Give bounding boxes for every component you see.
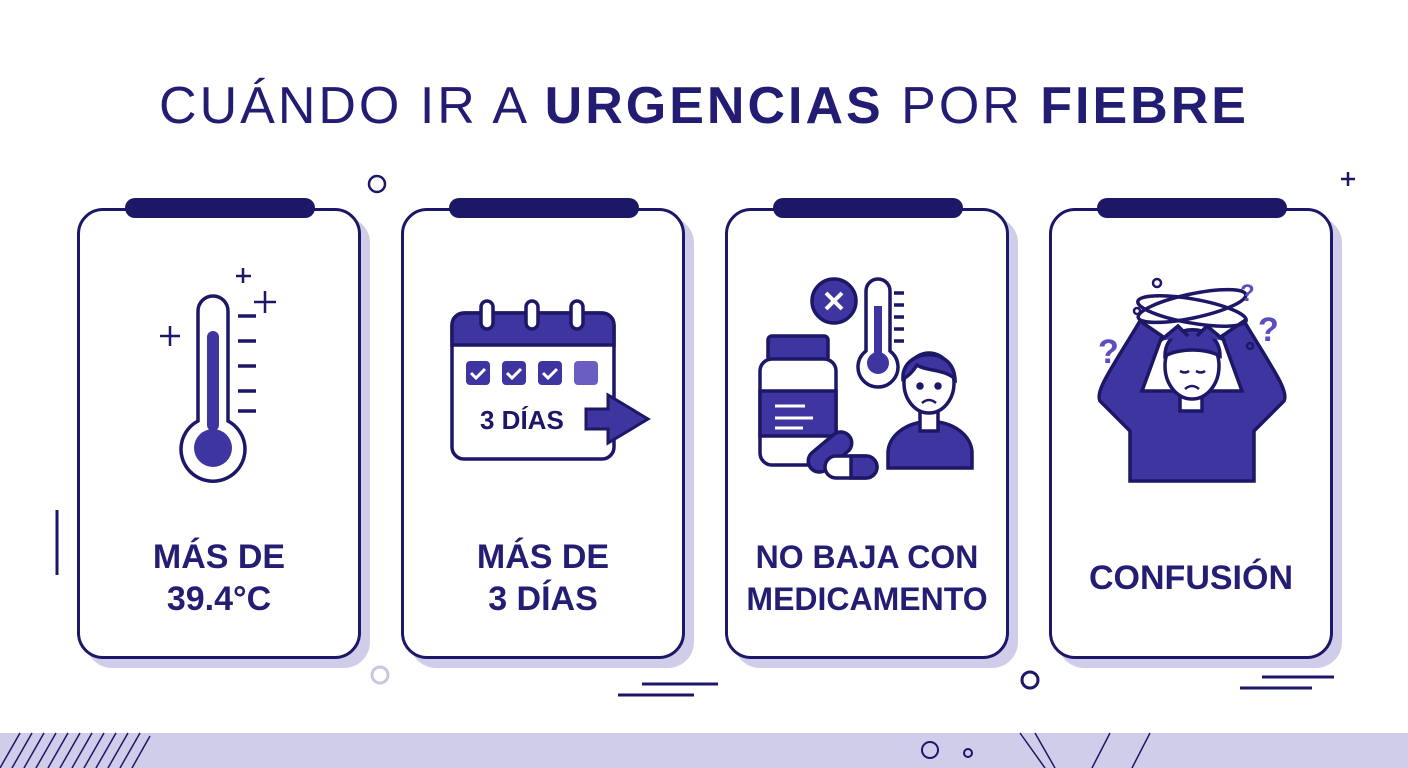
icon: thermometer [160, 268, 276, 483]
panel: confusion [1049, 208, 1333, 659]
label [477, 538, 609, 618]
icon: confused person: ? [1258, 311, 1279, 349]
panel: medication [725, 208, 1009, 659]
panel: days [401, 208, 685, 659]
icon: calendar [450, 299, 651, 461]
label: MÁS DE [153, 538, 285, 576]
label: 3 DÍAS [488, 580, 598, 618]
label [153, 538, 285, 618]
title: CUÁNDO IR A URGENCIAS POR FIEBRE [159, 77, 1249, 135]
label: MÁS DE [477, 538, 609, 576]
icon: confused person: ? [1098, 333, 1119, 371]
label: CONFUSIÓN [1089, 559, 1293, 597]
label: NO BAJA CON [756, 539, 978, 575]
label: MEDICAMENTO [746, 581, 988, 617]
panel: temperature [77, 208, 361, 659]
label [746, 539, 988, 617]
icon: medicine and person [758, 277, 974, 480]
icon: confused person [1097, 278, 1287, 483]
icon: confused person: ? [1240, 280, 1255, 307]
label: 39.4°C [167, 580, 271, 618]
icon: calendar: 3 DÍAS [480, 405, 564, 435]
